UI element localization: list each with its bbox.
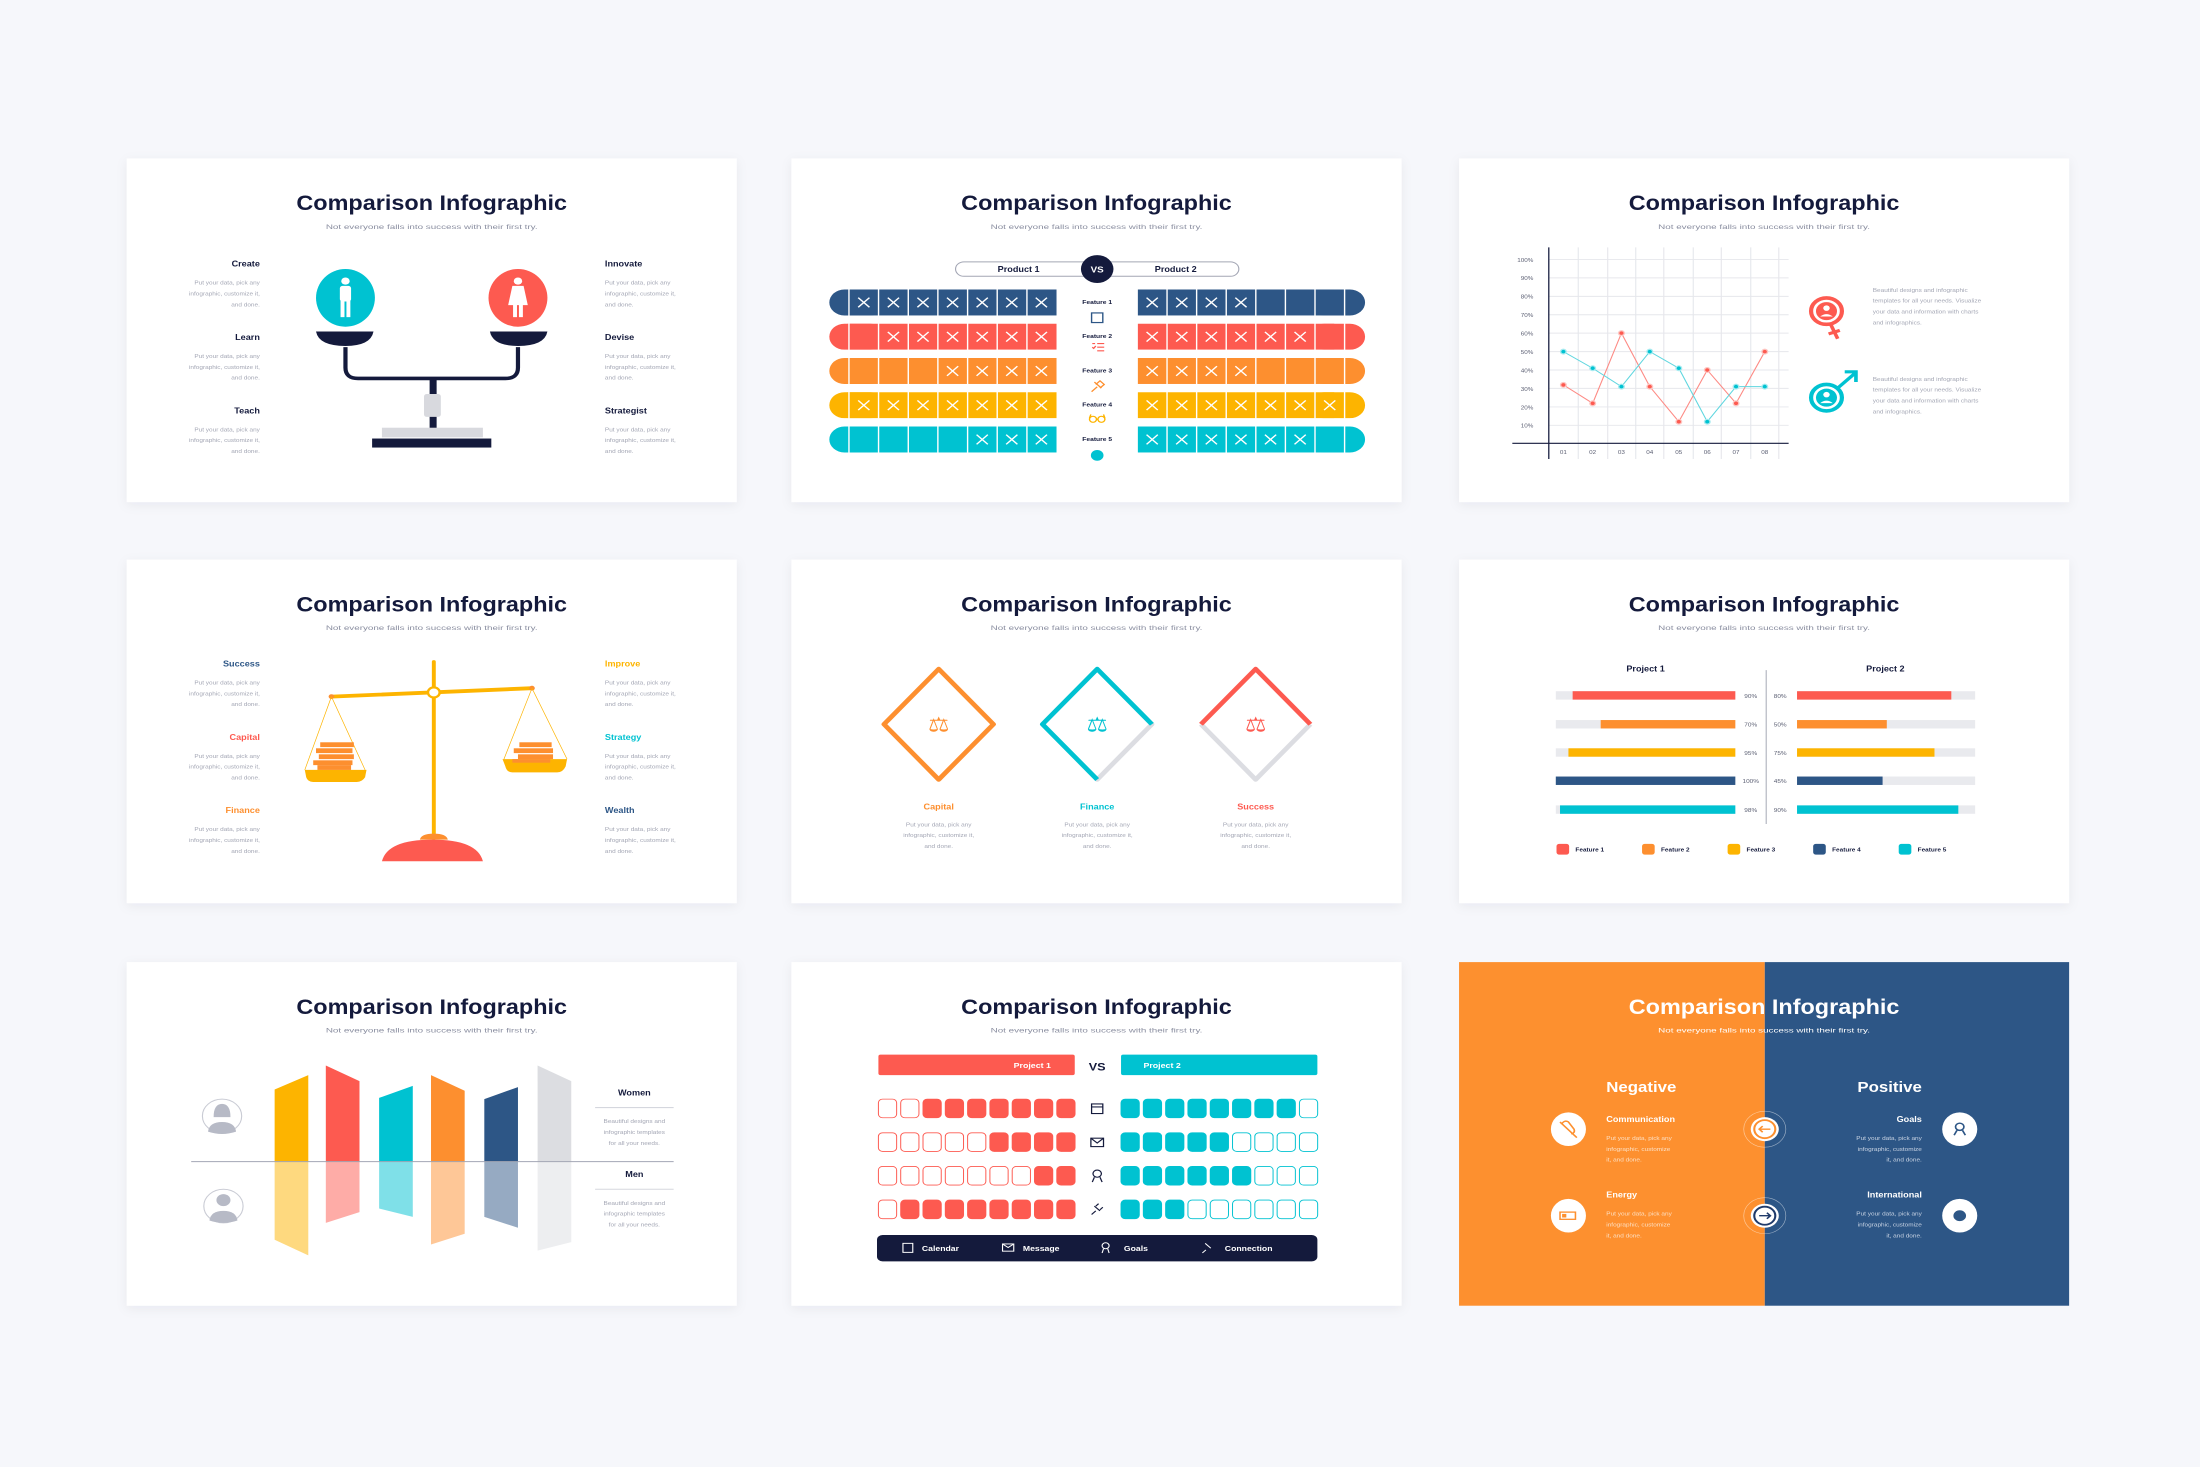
bar chart: Project 2 — [1866, 664, 1905, 673]
title: Not everyone falls into success with their first try. — [326, 222, 538, 231]
left labels: Put your data, pick any — [194, 428, 260, 433]
header pill — [956, 255, 1239, 283]
text: women: for all your needs. — [609, 1141, 660, 1147]
diamond: capital: ⚖ — [928, 713, 949, 736]
left labels: and done. — [231, 303, 260, 308]
header bars — [878, 1055, 1317, 1075]
line chart: 90% — [1521, 277, 1533, 282]
right labels: Devise — [605, 333, 635, 342]
header bars: Project 2 — [1143, 1061, 1181, 1070]
text blocks — [1873, 288, 1982, 415]
text blocks: and infographics. — [1873, 410, 1922, 415]
feature labels and icons: Feature 3 — [1082, 368, 1113, 374]
card 8: project squares — [791, 962, 1402, 1306]
left labels: Finance — [226, 806, 260, 815]
line chart: 70% — [1521, 313, 1533, 319]
line chart — [1512, 247, 1789, 459]
title — [1629, 191, 1899, 231]
left labels: and done. — [231, 703, 260, 708]
line chart: 01 — [1560, 450, 1567, 456]
positive column: Put your data, pick any — [1856, 1136, 1922, 1142]
right labels: Put your data, pick any — [605, 354, 670, 360]
legend: Feature 3 — [1747, 848, 1776, 854]
diamond: capital: infographic, customize it, — [903, 834, 975, 839]
left labels: Teach — [234, 406, 260, 415]
card 1: balance with people — [127, 158, 737, 502]
scale — [305, 662, 567, 861]
left labels: and done. — [231, 376, 260, 381]
left labels — [189, 659, 260, 855]
text blocks: templates for all your needs. Visualize — [1873, 299, 1982, 305]
right labels: Strategist — [605, 406, 647, 415]
diamond: capital: Put your data, pick any — [906, 823, 971, 828]
left labels: infographic, customize it, — [189, 365, 260, 371]
negative column: it, and done. — [1606, 1158, 1642, 1163]
text: men: for all your needs. — [609, 1223, 660, 1228]
title — [296, 191, 567, 231]
text: men — [595, 1170, 674, 1228]
negative column: Energy — [1606, 1190, 1637, 1200]
positive column — [1856, 1080, 1977, 1239]
legend bar: Calendar — [922, 1245, 960, 1253]
left labels: Learn — [235, 333, 260, 342]
title: Comparison Infographic — [961, 994, 1232, 1018]
text: men: Beautiful designs and — [604, 1201, 665, 1207]
diamond: success: Success — [1237, 802, 1274, 811]
left labels: and done. — [231, 776, 260, 781]
title: Comparison Infographic — [296, 592, 567, 616]
left labels: Put your data, pick any — [194, 281, 260, 287]
title: Comparison Infographic — [1629, 994, 1899, 1018]
text blocks: and infographics. — [1873, 321, 1922, 326]
right labels: Put your data, pick any — [605, 754, 670, 760]
positive column: International — [1867, 1190, 1922, 1200]
left labels: infographic, customize it, — [189, 692, 260, 697]
text: women: Women — [618, 1088, 651, 1097]
positive column: Positive — [1857, 1080, 1922, 1096]
negative column: it, and done. — [1606, 1234, 1642, 1239]
right labels: infographic, customize it, — [605, 692, 676, 697]
diamond: success: and done. — [1241, 844, 1270, 850]
card 2: product feature grid — [791, 158, 1402, 502]
feature labels and icons: Feature 4 — [1082, 402, 1113, 409]
title: Not everyone falls into success with their first try. — [991, 1026, 1202, 1034]
title: Comparison Infographic — [296, 191, 567, 215]
title: Comparison Infographic — [961, 592, 1232, 616]
right labels: Put your data, pick any — [605, 828, 670, 833]
legend: Feature 1 — [1575, 848, 1605, 854]
diamond: capital — [884, 669, 993, 850]
right labels: Improve — [605, 659, 641, 668]
legend bar: Connection — [1225, 1245, 1273, 1253]
card 5: diamonds — [791, 560, 1402, 903]
title — [1629, 994, 1899, 1034]
line chart: 100% — [1517, 258, 1533, 264]
title — [961, 994, 1232, 1034]
text blocks: Beautiful designs and infographic — [1873, 288, 1968, 294]
negative column: infographic, customize — [1606, 1223, 1671, 1228]
left labels: and done. — [231, 849, 260, 855]
left labels: Put your data, pick any — [194, 681, 260, 686]
right labels: Wealth — [605, 806, 635, 815]
title — [296, 592, 567, 632]
left labels: Create — [232, 259, 260, 268]
title: Not everyone falls into success with their first try. — [1658, 623, 1870, 632]
legend — [1557, 844, 1947, 855]
icon: male — [1811, 372, 1856, 411]
line chart: 80% — [1521, 295, 1533, 301]
project 1 squares — [878, 1099, 1075, 1219]
diamond: finance: ⚖ — [1087, 713, 1108, 736]
left labels: Put your data, pick any — [194, 754, 260, 760]
right labels: Innovate — [605, 259, 643, 268]
positive column: Goals — [1897, 1115, 1922, 1124]
text: women: infographic templates — [604, 1130, 665, 1136]
right labels: Put your data, pick any — [605, 281, 670, 287]
header pill: VS — [1091, 265, 1104, 275]
legend bar — [877, 1235, 1317, 1261]
text blocks: your data and information with charts — [1873, 310, 1978, 315]
diamond: finance: infographic, customize it, — [1062, 834, 1133, 839]
diamond: finance: and done. — [1083, 844, 1112, 850]
left labels: Put your data, pick any — [194, 354, 260, 360]
card 6: project bar chart — [1459, 560, 2069, 903]
line chart: 03 — [1618, 450, 1625, 456]
legend: Feature 4 — [1832, 848, 1861, 854]
line chart: 50% — [1521, 350, 1533, 356]
arrow icons — [1744, 1111, 1786, 1234]
legend: Feature 2 — [1661, 848, 1690, 854]
title — [961, 592, 1232, 632]
line chart: 07 — [1733, 450, 1740, 456]
line chart: 40% — [1521, 369, 1533, 374]
line chart: 06 — [1704, 450, 1711, 456]
positive column: Put your data, pick any — [1856, 1212, 1922, 1218]
header pill: Product 1 — [998, 265, 1040, 274]
scale with people — [316, 269, 547, 448]
right labels: and done. — [605, 376, 634, 381]
line chart: 05 — [1675, 450, 1683, 456]
positive column: it, and done. — [1886, 1158, 1922, 1163]
negative column — [1551, 1080, 1677, 1239]
negative column: Negative — [1606, 1080, 1677, 1096]
right labels — [605, 259, 676, 455]
bar chart: 80% — [1774, 694, 1787, 700]
left labels: infographic, customize it, — [189, 838, 260, 844]
legend: Feature 5 — [1918, 848, 1947, 854]
diamond: finance — [1042, 669, 1152, 850]
left labels: and done. — [231, 449, 260, 455]
right labels: Put your data, pick any — [605, 428, 670, 433]
row icons — [1091, 1104, 1104, 1215]
title: Not everyone falls into success with their first try. — [1658, 222, 1870, 231]
title — [296, 994, 567, 1034]
diamond: capital: and done. — [924, 844, 953, 850]
right labels: infographic, customize it, — [605, 438, 676, 444]
left labels: infographic, customize it, — [189, 292, 260, 297]
feature labels and icons: Feature 1 — [1082, 299, 1113, 306]
text: men: infographic templates — [604, 1212, 665, 1218]
line chart: 20% — [1521, 406, 1533, 411]
card 4: golden scale — [127, 560, 737, 903]
legend bar: Goals — [1124, 1245, 1148, 1253]
right labels: and done. — [605, 703, 634, 708]
right labels: and done. — [605, 449, 634, 455]
left labels: infographic, customize it, — [189, 765, 260, 771]
avatar: man — [204, 1189, 243, 1223]
right labels: and done. — [605, 303, 634, 308]
text: women — [595, 1088, 674, 1147]
left labels — [189, 259, 260, 455]
card 3: line chart — [1459, 158, 2069, 502]
bar chart: 100% — [1743, 779, 1760, 785]
text blocks: templates for all your needs. Visualize — [1873, 388, 1982, 393]
title: Not everyone falls into success with their first try. — [326, 623, 538, 632]
bar chart: Project 1 — [1626, 664, 1665, 673]
diamond: finance: Put your data, pick any — [1064, 823, 1130, 828]
bar chart: 90% — [1744, 694, 1758, 700]
title: Comparison Infographic — [961, 191, 1232, 215]
positive column: infographic, customize — [1858, 1147, 1923, 1153]
positive column: infographic, customize — [1858, 1223, 1923, 1228]
positive column: it, and done. — [1886, 1234, 1922, 1239]
line chart: 02 — [1589, 450, 1596, 456]
title: Not everyone falls into success with their first try. — [326, 1026, 538, 1034]
bar chart: 70% — [1744, 723, 1758, 729]
left labels: Success — [223, 659, 260, 668]
right labels: infographic, customize it, — [605, 292, 676, 297]
bar chart: 95% — [1744, 751, 1758, 757]
title: Comparison Infographic — [296, 994, 567, 1018]
right labels: Put your data, pick any — [605, 681, 670, 686]
title: Comparison Infographic — [1629, 592, 1899, 616]
right labels: Strategy — [605, 733, 642, 742]
text: men: Men — [625, 1170, 643, 1179]
header bars: VS — [1089, 1061, 1106, 1073]
bar chart: 75% — [1774, 751, 1787, 757]
title: Not everyone falls into success with their first try. — [1658, 1026, 1870, 1034]
right labels — [605, 659, 676, 855]
card 7: women vs men bars — [127, 962, 737, 1306]
title — [961, 191, 1232, 231]
reflected bars — [191, 1065, 674, 1255]
line chart: 60% — [1521, 332, 1533, 337]
line chart: 10% — [1521, 424, 1533, 430]
left labels: Put your data, pick any — [194, 828, 260, 833]
title: Not everyone falls into success with their first try. — [991, 222, 1202, 231]
diamond: capital: Capital — [924, 802, 954, 811]
feature labels and icons — [1082, 299, 1113, 461]
text blocks: your data and information with charts — [1873, 399, 1978, 404]
header bars: Project 1 — [1014, 1061, 1051, 1070]
negative column: Put your data, pick any — [1606, 1136, 1672, 1142]
diamond: success: ⚖ — [1245, 713, 1266, 736]
left labels: infographic, customize it, — [189, 438, 260, 444]
negative column: Put your data, pick any — [1606, 1212, 1672, 1218]
right labels: infographic, customize it, — [605, 765, 676, 771]
negative column: Communication — [1606, 1115, 1675, 1124]
diamond: success: infographic, customize it, — [1220, 834, 1291, 839]
text: women: Beautiful designs and — [604, 1119, 665, 1125]
product 1 bars — [829, 288, 1058, 454]
product 2 bars — [1136, 288, 1366, 454]
header pill: Product 2 — [1155, 265, 1197, 274]
negative column: infographic, customize — [1606, 1147, 1671, 1153]
title: Not everyone falls into success with their first try. — [991, 623, 1202, 632]
diamond: success — [1201, 669, 1310, 850]
left labels: Capital — [230, 733, 260, 742]
title — [1629, 592, 1899, 632]
bar chart: 45% — [1774, 779, 1787, 785]
line chart: 04 — [1646, 450, 1654, 456]
legend bar: Message — [1023, 1245, 1060, 1253]
diamond: success: Put your data, pick any — [1223, 823, 1288, 828]
right labels: infographic, customize it, — [605, 838, 676, 844]
avatar: woman — [202, 1099, 242, 1134]
card 9: negative vs positive — [1459, 962, 2069, 1306]
bar chart — [1556, 664, 1975, 824]
right labels: and done. — [605, 849, 634, 855]
bar chart: 90% — [1774, 808, 1787, 814]
line chart: 30% — [1521, 387, 1533, 393]
feature labels and icons: Feature 2 — [1082, 334, 1113, 340]
right labels: infographic, customize it, — [605, 365, 676, 371]
text blocks: Beautiful designs and infographic — [1873, 377, 1968, 383]
bar chart: 50% — [1774, 723, 1787, 729]
right labels: and done. — [605, 776, 634, 781]
icon: female — [1811, 298, 1842, 339]
line chart: 08 — [1761, 450, 1768, 456]
feature labels and icons: Feature 5 — [1082, 436, 1113, 443]
diamond: finance: Finance — [1080, 802, 1115, 811]
bar chart: 98% — [1744, 808, 1758, 814]
title: Comparison Infographic — [1629, 191, 1899, 215]
project 2 squares — [1121, 1099, 1318, 1219]
